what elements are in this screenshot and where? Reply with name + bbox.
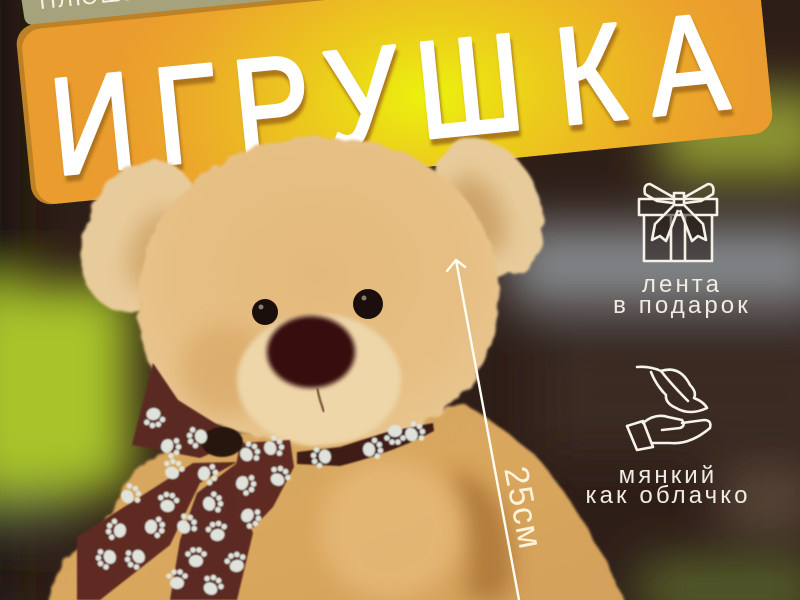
left tail: [77, 462, 237, 600]
title banner: [15, 0, 774, 206]
bow knot: [201, 427, 243, 457]
bear right eye: [353, 289, 383, 319]
bear nose: [267, 316, 355, 388]
top grey label: [20, 0, 282, 25]
bear body: [48, 405, 632, 600]
right loop: [233, 440, 294, 528]
softness caption: как облачко: [585, 482, 751, 509]
bear arm shading: [450, 470, 512, 600]
height arrow: [447, 260, 519, 600]
right tail: [170, 463, 253, 600]
neck ribbon: [297, 423, 434, 466]
height label: 25см: [496, 463, 550, 553]
bear mouth: [317, 388, 324, 412]
gift caption: в подарок: [613, 292, 751, 319]
teddy bear: [48, 121, 632, 600]
bear chest highlight: [320, 460, 460, 600]
icon: feather over hand: [627, 367, 710, 450]
right ear inner: [439, 167, 517, 263]
bear right ear: [411, 121, 565, 295]
bear cheek shading: [180, 325, 270, 415]
left ear inner: [117, 202, 193, 298]
left loop: [132, 363, 242, 458]
bear snout: [237, 314, 401, 446]
bear left eye: [252, 299, 278, 325]
gift caption: лента: [642, 271, 722, 298]
bear left ear: [59, 143, 221, 329]
ribbon bow: [77, 363, 434, 600]
icon: gift box: [639, 184, 717, 261]
paw prints: [93, 406, 429, 599]
bear head: [138, 137, 498, 443]
softness caption: мянкий: [619, 462, 717, 489]
hand: [627, 421, 653, 450]
